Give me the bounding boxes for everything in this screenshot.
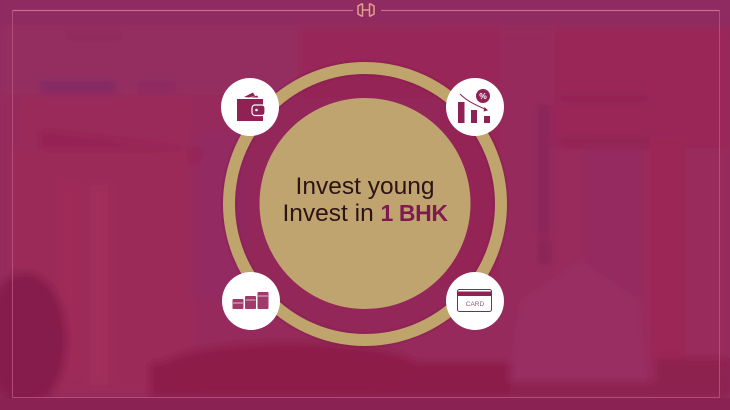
- top and bottom bands: [0, 0, 730, 24]
- icon: coin stacks: [222, 272, 280, 330]
- heading: Invest young: [296, 173, 434, 200]
- icon: wallet: [221, 78, 279, 136]
- icon: card: [446, 272, 504, 330]
- ring: [229, 68, 501, 340]
- icon: card: CARD: [466, 301, 485, 308]
- left tower: [22, 95, 187, 145]
- right building: [555, 28, 730, 148]
- fountain: [505, 260, 650, 400]
- left sky: [0, 24, 300, 94]
- mid towers: [300, 30, 440, 98]
- foreground trees: [150, 362, 510, 398]
- icon: falling percent chart: %: [479, 91, 487, 101]
- icon: falling percent chart: [446, 78, 504, 136]
- heading: [282, 173, 448, 227]
- centre disc: [260, 98, 470, 309]
- heading: Invest in 1 BHK: [282, 200, 448, 227]
- icon: logo: [358, 4, 374, 16]
- left trees: [0, 272, 67, 408]
